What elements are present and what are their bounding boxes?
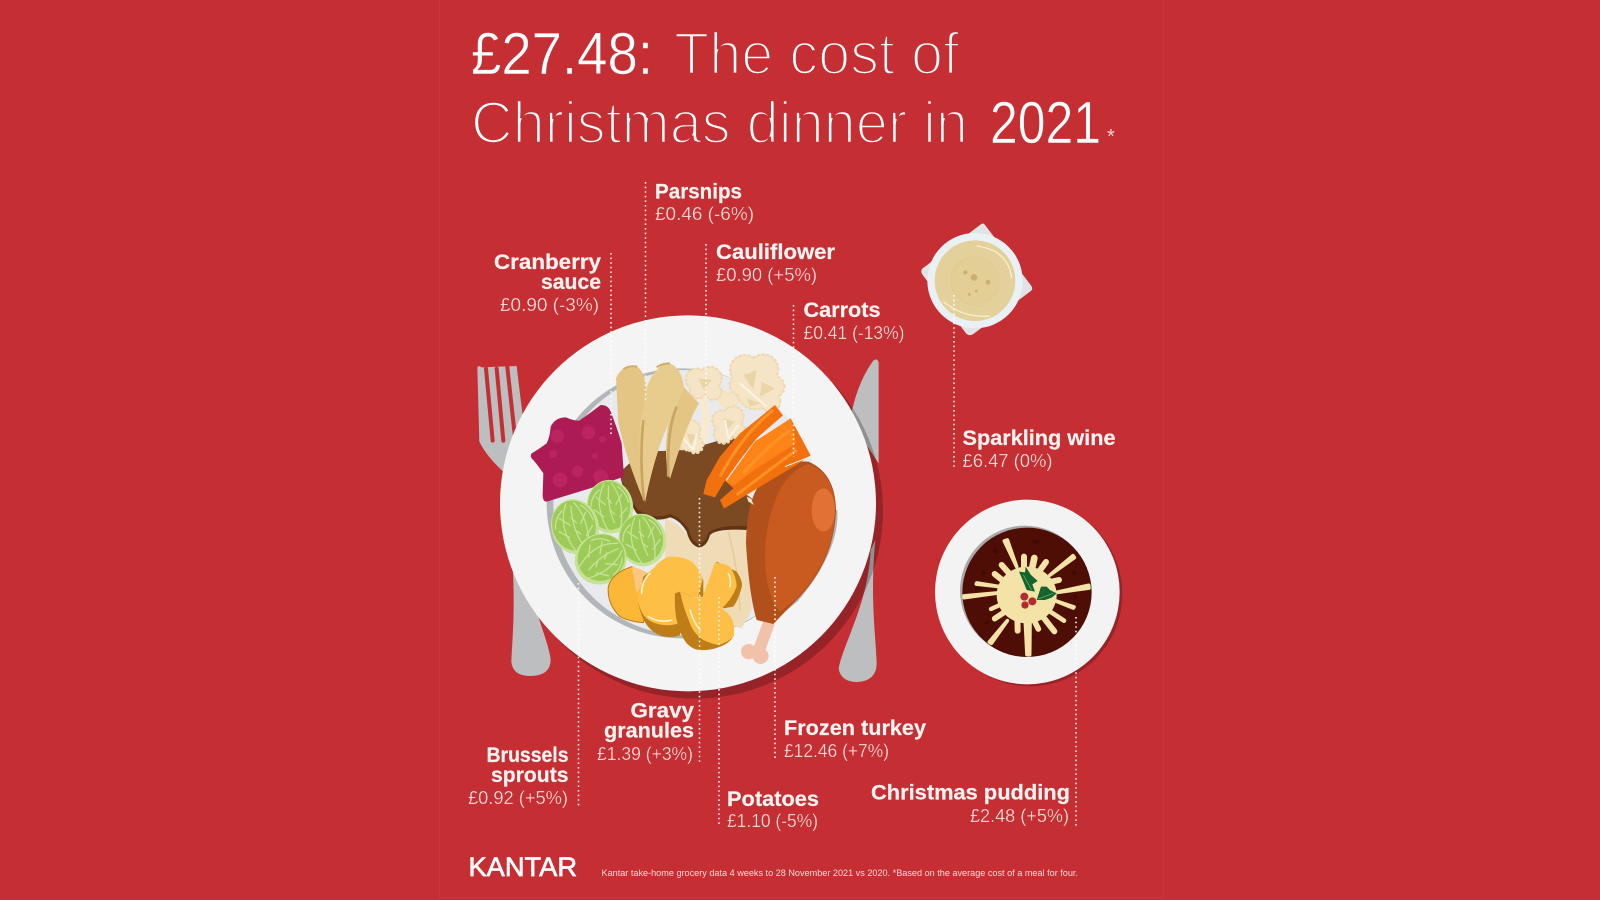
title: Christmas dinner in bbox=[471, 90, 968, 156]
label: frozen turkey bbox=[784, 717, 926, 761]
parsnips bbox=[616, 363, 699, 503]
label: gravy granules bbox=[597, 700, 694, 764]
label: brussels sprouts: sprouts bbox=[491, 764, 568, 787]
label: cauliflower bbox=[716, 241, 835, 285]
title: £27.48: bbox=[471, 21, 653, 87]
footnote: Kantar take-home grocery data 4 weeks to 28 November 2021 vs 2020. *Based on the average cost of a meal for four. bbox=[602, 868, 1078, 879]
label: sparkling wine bbox=[962, 427, 1116, 471]
label: carrots: £0.41 (-13%) bbox=[804, 322, 904, 343]
icon: sparkling wine glass on coaster bbox=[921, 223, 1032, 335]
plate bbox=[500, 315, 876, 691]
label: carrots bbox=[804, 299, 904, 343]
label: christmas pudding bbox=[871, 782, 1070, 826]
label: frozen turkey: £12.46 (+7%) bbox=[784, 740, 889, 761]
cranberry sauce bbox=[531, 405, 624, 502]
holly bbox=[1019, 567, 1057, 609]
label: brussels sprouts: Brussels bbox=[486, 744, 568, 767]
custard bbox=[964, 540, 1089, 655]
label: brussels sprouts bbox=[468, 744, 568, 808]
illustration: dinner plate with cutlery bbox=[477, 315, 883, 699]
icon: Christmas pudding bowl bbox=[935, 500, 1122, 686]
mashed potato bbox=[665, 518, 752, 628]
label: potatoes bbox=[727, 788, 819, 831]
carrots bbox=[703, 405, 811, 509]
label: carrots: Carrots bbox=[804, 299, 880, 322]
turkey drumstick bbox=[741, 462, 836, 664]
label: christmas pudding: Christmas pudding bbox=[871, 782, 1070, 804]
label: brussels sprouts: £0.92 (+5%) bbox=[468, 787, 568, 808]
icon: fork bbox=[477, 366, 551, 676]
gravy bbox=[620, 435, 752, 547]
label: parsnips bbox=[655, 180, 754, 224]
cauliflower bbox=[680, 355, 783, 452]
brussels sprouts bbox=[545, 477, 671, 595]
label: cauliflower: £0.90 (+5%) bbox=[716, 264, 817, 285]
label: cranberry sauce bbox=[494, 251, 601, 315]
label: cranberry sauce: £0.90 (-3%) bbox=[500, 294, 599, 315]
plate well bbox=[547, 368, 817, 638]
label: potatoes: Potatoes bbox=[727, 788, 819, 811]
title: 2021 bbox=[990, 90, 1101, 156]
label: christmas pudding: £2.48 (+5%) bbox=[970, 805, 1069, 826]
label: sparkling wine: £6.47 (0%) bbox=[962, 450, 1052, 471]
icon: knife bbox=[839, 359, 879, 682]
plate shadow bbox=[507, 323, 883, 699]
label: parsnips: Parsnips bbox=[655, 180, 742, 204]
roast potatoes bbox=[608, 557, 742, 650]
label: cauliflower: Cauliflower bbox=[716, 241, 835, 264]
label: gravy granules: Gravy bbox=[630, 700, 694, 722]
label: parsnips: £0.46 (-6%) bbox=[655, 203, 754, 224]
title: * bbox=[1107, 126, 1115, 148]
label: sparkling wine: Sparkling wine bbox=[962, 427, 1116, 450]
label: potatoes: £1.10 (-5%) bbox=[727, 810, 818, 831]
label: gravy granules: granules bbox=[604, 720, 694, 742]
label: gravy granules: £1.39 (+3%) bbox=[597, 743, 693, 764]
label: cranberry sauce: Cranberry bbox=[494, 251, 601, 274]
callout lines bbox=[578, 182, 1076, 827]
title: The cost of bbox=[674, 21, 960, 87]
logo: Kantar: KANTAR bbox=[468, 852, 577, 882]
title bbox=[471, 21, 1115, 156]
label: frozen turkey: Frozen turkey bbox=[784, 717, 926, 740]
label: cranberry sauce: sauce bbox=[541, 271, 601, 294]
